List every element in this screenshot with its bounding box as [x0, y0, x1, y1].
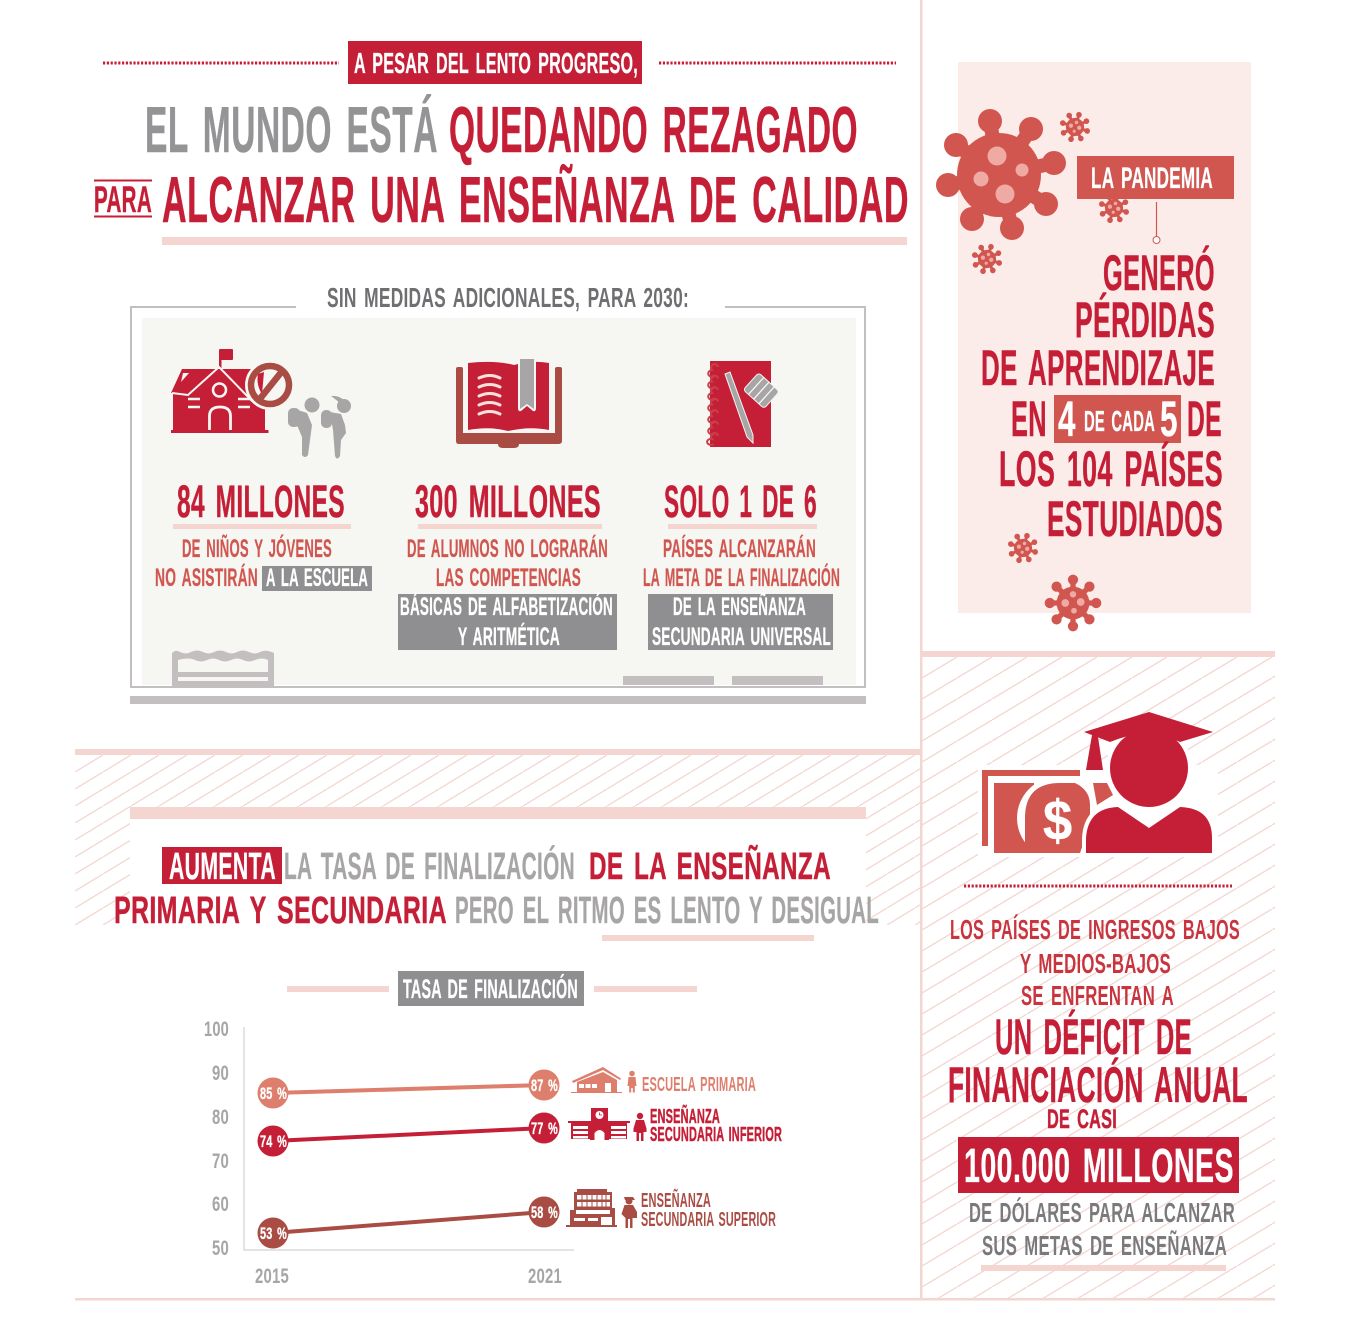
- stat: 300 millones: BÁSICAS DE ALFABETIZACIÓN: [400, 591, 613, 621]
- series: secundaria inferior: 77 %: [531, 1119, 558, 1138]
- floor details: [172, 650, 823, 686]
- title block: [94, 41, 909, 245]
- stat: 300 millones: Y ARITMÉTICA: [458, 622, 560, 651]
- y axis labels: 90: [212, 1062, 229, 1085]
- x axis labels: [255, 1265, 562, 1288]
- stat: solo 1 de 6: DE LA ENSEÑANZA: [673, 591, 806, 621]
- headline line 1: QUEDANDO REZAGADO: [449, 93, 858, 166]
- stat: 300 millones: [398, 476, 617, 651]
- label: la pandemia: [1077, 156, 1234, 244]
- headline line 2: [94, 163, 909, 245]
- panel: aumenta la tasa de finalización: [114, 807, 879, 1006]
- text: déficit statement: SE ENFRENTAN A: [1021, 980, 1174, 1011]
- series: primaria: 85 %: [260, 1084, 287, 1103]
- chart title: [287, 971, 697, 1006]
- icon: notebook and pencil: [707, 361, 779, 447]
- panel: déficit de financiación: [948, 712, 1248, 1271]
- x axis labels: 2021: [528, 1265, 562, 1288]
- text: pandemic statement: PÉRDIDAS: [1075, 292, 1215, 348]
- stat: 84 millones: [155, 476, 372, 592]
- heading line 1: LA TASA DE FINALIZACIÓN: [284, 844, 575, 888]
- text: metas de enseñanza: [969, 1197, 1235, 1271]
- legend: secundaria inferior: [568, 1105, 782, 1146]
- eyebrow banner: A PESAR DEL LENTO PROGRESO,: [354, 48, 638, 80]
- legend: secundaria superior: [566, 1189, 776, 1231]
- heading line 1: AUMENTA: [169, 846, 276, 888]
- legend: escuela primaria: [571, 1067, 756, 1096]
- stat: 84 millones: A LA ESCUELA: [266, 564, 368, 592]
- icon: money and graduate: $: [1043, 789, 1073, 853]
- y axis labels: 80: [212, 1106, 229, 1129]
- chart title: TASA DE FINALIZACIÓN: [403, 973, 578, 1004]
- amount callout: [958, 1137, 1239, 1193]
- stat: 300 millones: 300 MILLONES: [415, 476, 601, 527]
- stat: 84 millones: 84 MILLONES: [177, 476, 345, 527]
- stat: solo 1 de 6: SECUNDARIA UNIVERSAL: [652, 623, 831, 651]
- headline line 2: PARA: [94, 179, 152, 220]
- panel: sin medidas adicionales: [130, 282, 866, 704]
- stat: solo 1 de 6: SOLO 1 DE 6: [664, 476, 817, 527]
- heading: SIN MEDIDAS ADICIONALES, PARA 2030:: [327, 282, 689, 313]
- heading line 2: PRIMARIA Y SECUNDARIA: [114, 890, 447, 932]
- heading line 1: DE LA ENSEÑANZA: [589, 844, 831, 888]
- text: pandemic statement: DE CADA: [1084, 406, 1155, 438]
- text: pandemic statement: 4: [1058, 391, 1076, 447]
- icon: closed school with children: [171, 349, 351, 458]
- stat: solo 1 de 6: [643, 476, 840, 651]
- legend: secundaria superior: ENSEÑANZA: [641, 1189, 711, 1212]
- stat: solo 1 de 6: PAÍSES ALCANZARÁN: [663, 534, 816, 563]
- series: secundaria superior: 53 %: [260, 1224, 287, 1243]
- heading line 2: PERO EL RITMO ES LENTO Y DESIGUAL: [455, 890, 879, 932]
- panel: sin medidas adicionales: LA META DE LA FINALIZACIÓN: [643, 562, 840, 592]
- line chart: tasa de finalización: [204, 1018, 782, 1288]
- text: déficit statement: Y MEDIOS-BAJOS: [1020, 948, 1171, 979]
- text: déficit statement: DE CASI: [1047, 1104, 1117, 1134]
- text: pandemic statement: DE: [1187, 391, 1222, 447]
- label: la pandemia: LA PANDEMIA: [1091, 162, 1213, 195]
- legend: secundaria inferior: ENSEÑANZA: [650, 1105, 720, 1128]
- y axis labels: 50: [212, 1237, 229, 1260]
- y axis labels: 70: [212, 1150, 229, 1173]
- stat: 300 millones: DE ALUMNOS NO LOGRARÁN: [407, 534, 608, 563]
- panel: la pandemia: [936, 62, 1251, 631]
- series: secundaria inferior: 74 %: [260, 1132, 287, 1151]
- headline line 1: EL MUNDO ESTÁ: [145, 93, 438, 166]
- series: primaria: 87 %: [531, 1076, 558, 1095]
- stat: 84 millones: DE NIÑOS Y JÓVENES: [182, 533, 332, 563]
- y axis labels: 60: [212, 1193, 229, 1216]
- text: pandemic statement: 5: [1160, 391, 1178, 447]
- series: primaria: [258, 1070, 560, 1108]
- series: secundaria superior: [258, 1196, 560, 1248]
- icon: money and graduate: [978, 712, 1218, 859]
- stat: 300 millones: LAS COMPETENCIAS: [436, 564, 581, 592]
- stat: 84 millones: NO ASISTIRÁN: [155, 563, 258, 592]
- x axis labels: 2015: [255, 1265, 289, 1288]
- series: secundaria inferior: [258, 1112, 560, 1156]
- text: pandemic statement: GENERÓ: [1103, 245, 1215, 301]
- series: secundaria superior: 58 %: [531, 1203, 558, 1222]
- text: pandemic statement: [981, 245, 1223, 547]
- eyebrow banner: [103, 41, 896, 84]
- y axis labels: 100: [204, 1018, 229, 1041]
- y axis labels: [204, 1018, 229, 1260]
- icon: large virus: [936, 109, 1066, 240]
- icon: open book: [456, 358, 562, 448]
- text: déficit statement: [948, 914, 1248, 1134]
- legend: secundaria inferior: SECUNDARIA INFERIOR: [650, 1124, 782, 1146]
- legend: escuela primaria: ESCUELA PRIMARIA: [642, 1074, 756, 1096]
- text: pandemic statement: EN: [1011, 391, 1047, 447]
- icon: small viruses: [967, 107, 1101, 631]
- heading line 2: [114, 890, 879, 941]
- axes: [244, 1027, 574, 1250]
- legend: secundaria superior: SECUNDARIA SUPERIOR: [641, 1209, 776, 1231]
